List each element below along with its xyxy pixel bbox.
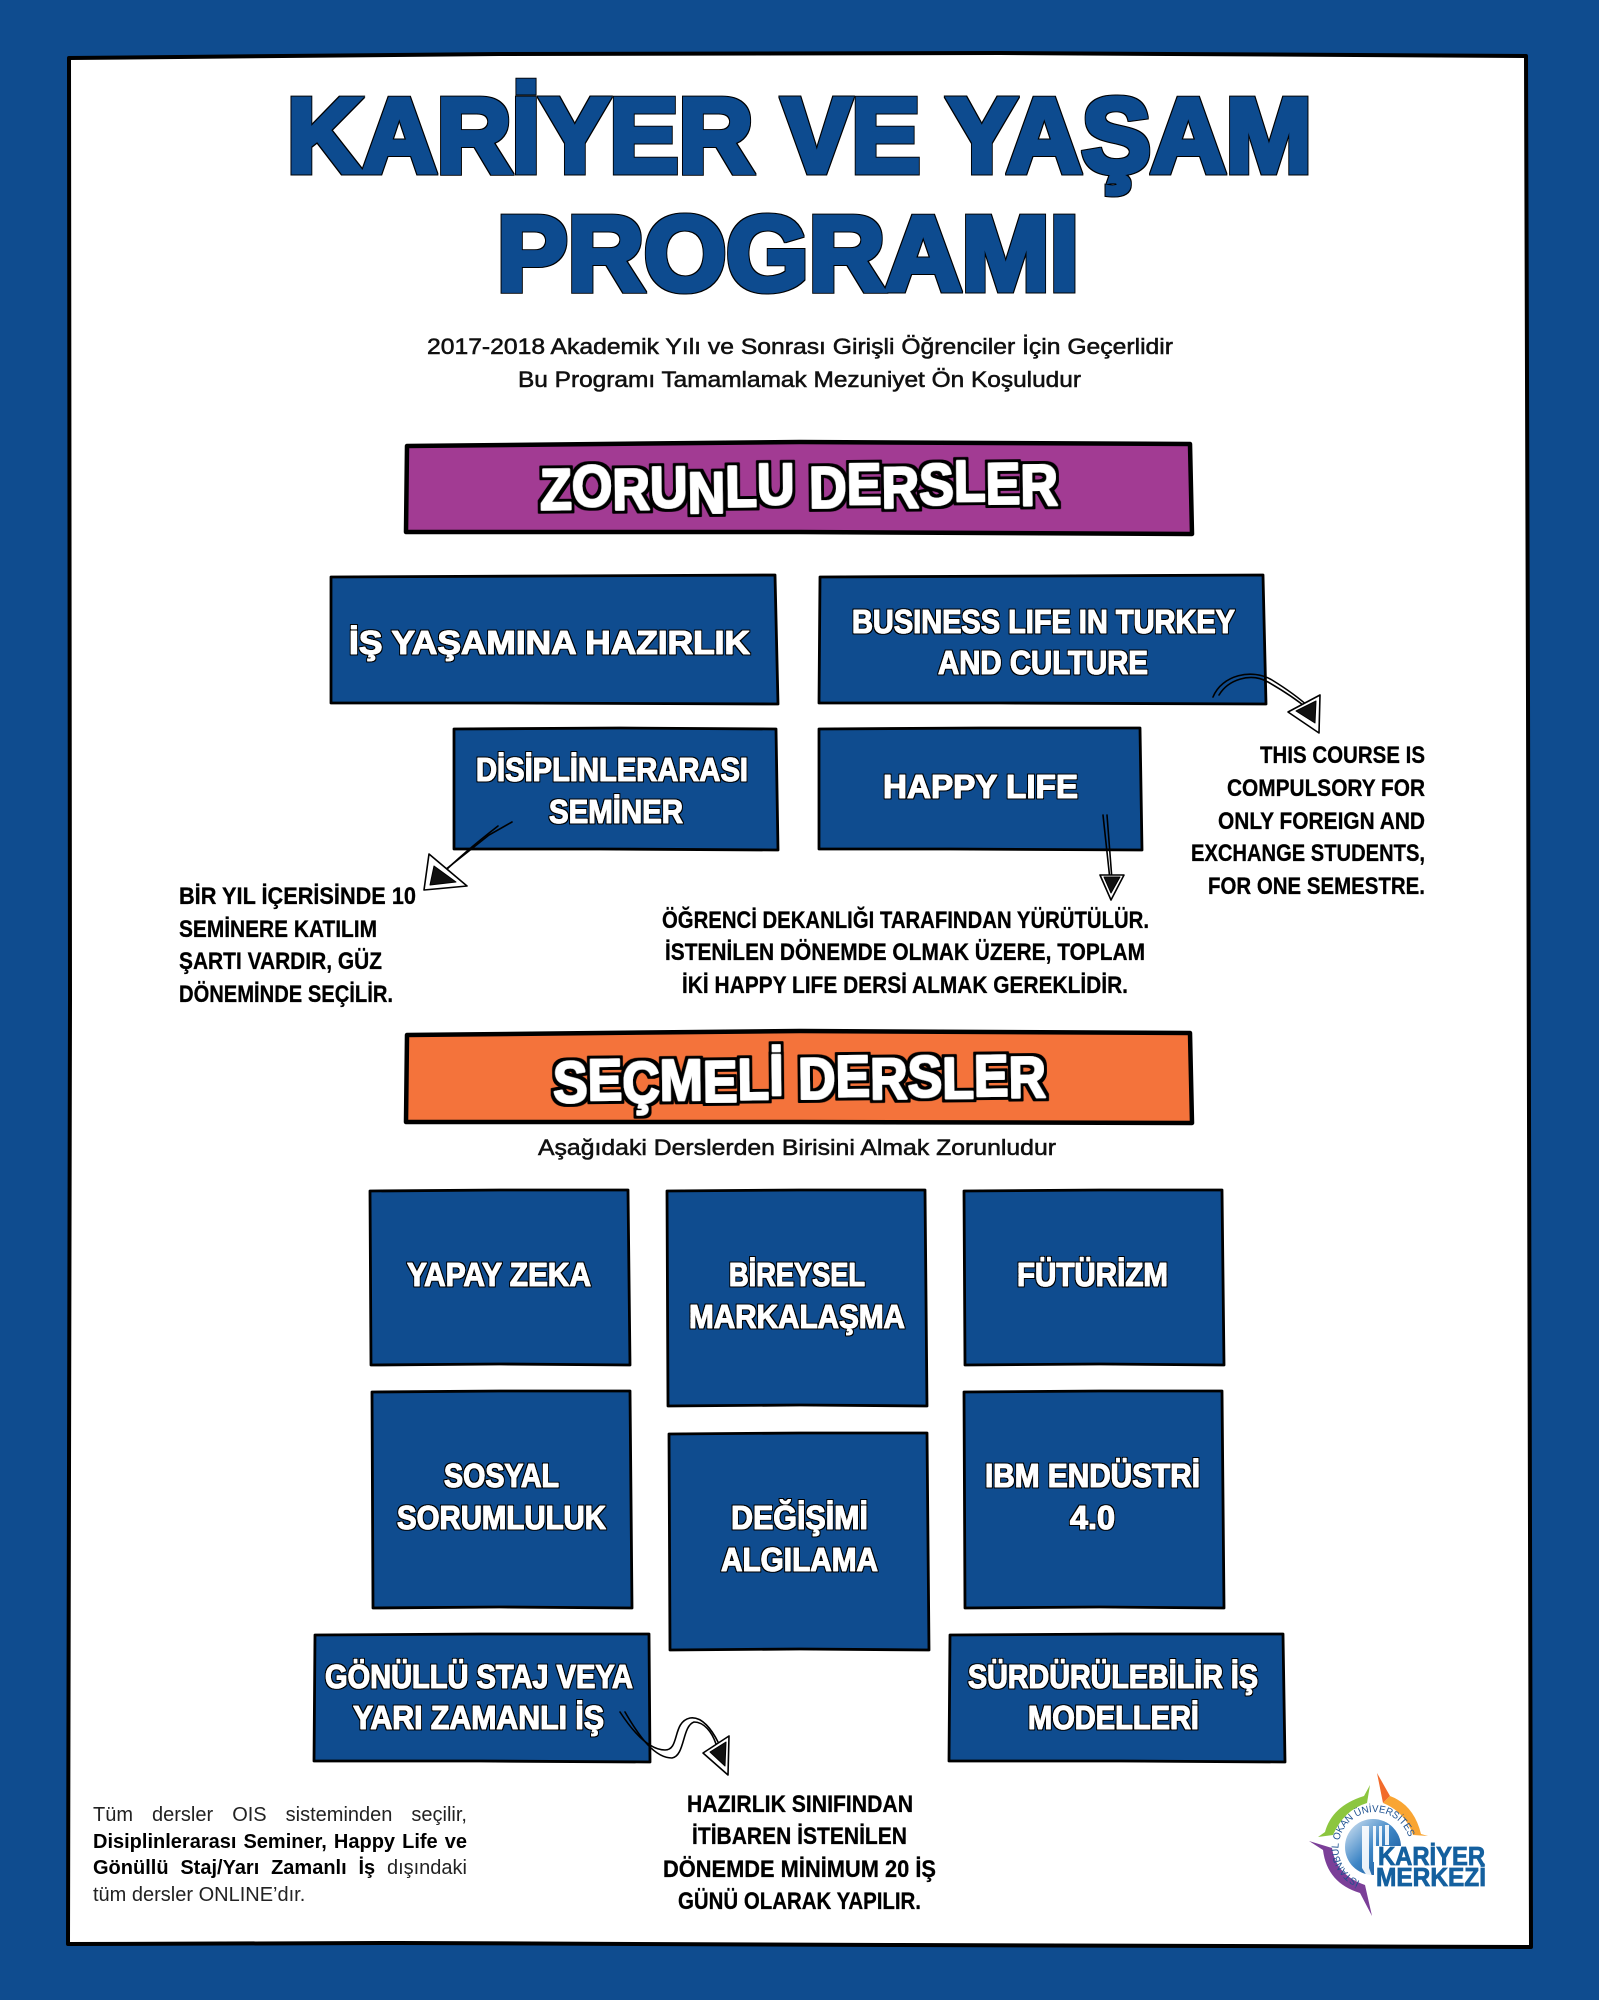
course box: disiplinlerarasi seminer: DİSİPLİNLERARASI xyxy=(476,751,748,788)
course box: yapay zeka xyxy=(370,1190,630,1365)
logo: kariyer merkezi: MERKEZİ xyxy=(1376,1862,1486,1892)
logo: kariyer merkezi: KARİYER xyxy=(1378,1841,1485,1871)
arrow: happy life note xyxy=(1100,815,1124,900)
course box: happy life xyxy=(819,728,1142,850)
course box: disiplinlerarasi seminer xyxy=(454,728,778,850)
note: foreign students: ONLY FOREIGN AND xyxy=(1218,808,1425,835)
note: happy life condition: İKİ HAPPY LIFE DERSİ ALMAK GEREKLİDİR. xyxy=(682,972,1128,999)
course box: happy life: HAPPY LIFE xyxy=(883,768,1078,805)
course box: surdurulebilir is modelleri: SÜRDÜRÜLEBİLİR İŞ xyxy=(968,1658,1258,1695)
note: staj condition: DÖNEMDE MİNİMUM 20 İŞ xyxy=(663,1856,936,1883)
note: happy life condition: ÖĞRENCİ DEKANLIĞI TARAFINDAN YÜRÜTÜLÜR. xyxy=(662,906,1149,934)
course box: futurizm: FÜTÜRİZM xyxy=(1017,1256,1168,1293)
note: foreign students: FOR ONE SEMESTRE. xyxy=(1208,873,1425,900)
title: KARİYER VE YAŞAM xyxy=(287,77,1312,195)
banner: secmeli dersler: SEÇMELİ DERSLER xyxy=(553,1040,1046,1117)
text block: online courses footnote: tüm dersler ONLINE’dır. xyxy=(93,1884,305,1906)
text block: online courses footnote: Gönüllü Staj/Yarı Zamanlı İş dışındaki xyxy=(93,1857,467,1879)
course box: disiplinlerarasi seminer: SEMİNER xyxy=(549,793,683,830)
note: staj condition: HAZIRLIK SINIFINDAN xyxy=(687,1791,913,1818)
course box: is yasamina hazirlik: İŞ YAŞAMINA HAZIRLIK xyxy=(349,624,750,661)
note: happy life condition: İSTENİLEN DÖNEMDE OLMAK ÜZERE, TOPLAM xyxy=(665,939,1145,966)
banner: zorunlu dersler: ZORUNLU DERSLER xyxy=(540,448,1058,528)
course box: business life: AND CULTURE xyxy=(938,644,1148,681)
arrow: staj note xyxy=(620,1712,729,1775)
note: seminer condition: BİR YIL İÇERİSİNDE 10 xyxy=(179,883,416,910)
note: staj condition: İTİBAREN İSTENİLEN xyxy=(692,1823,907,1850)
note: happy life condition xyxy=(662,906,1149,999)
note: foreign students xyxy=(1191,742,1425,900)
text block: online courses footnote xyxy=(93,1804,467,1906)
subtitle xyxy=(427,334,1174,392)
text block: online courses footnote: Disiplinlerarası Seminer, Happy Life ve xyxy=(93,1831,467,1853)
course box: degisimi algilama: DEĞİŞİMİ xyxy=(731,1499,868,1536)
text: elective instruction: Aşağıdaki Derslerden Birisini Almak Zorunludur xyxy=(538,1135,1057,1160)
title: PROGRAMI xyxy=(497,195,1079,313)
note: seminer condition xyxy=(179,883,416,1008)
subtitle: 2017-2018 Akademik Yılı ve Sonrası Girişli Öğrenciler İçin Geçerlidir xyxy=(427,334,1174,359)
note: seminer condition: DÖNEMİNDE SEÇİLİR. xyxy=(179,981,393,1008)
course box: business life xyxy=(819,575,1266,704)
note: foreign students: EXCHANGE STUDENTS, xyxy=(1191,840,1425,867)
course box: surdurulebilir is modelleri xyxy=(949,1634,1285,1762)
course box: ibm endustri 4.0: 4.0 xyxy=(1070,1499,1115,1536)
note: seminer condition: ŞARTI VARDIR, GÜZ xyxy=(179,948,382,975)
course box: is yasamina hazirlik xyxy=(331,575,778,704)
subtitle: Bu Programı Tamamlamak Mezuniyet Ön Koşuludur xyxy=(518,367,1082,392)
note: seminer condition: SEMİNERE KATILIM xyxy=(179,916,377,943)
course box: surdurulebilir is modelleri: MODELLERİ xyxy=(1028,1699,1199,1736)
text block: online courses footnote: Tüm dersler OIS sisteminden seçilir, xyxy=(93,1804,467,1826)
course box: bireysel markalasma xyxy=(667,1190,927,1406)
arrow: business life note xyxy=(1213,674,1320,733)
course box: yapay zeka: YAPAY ZEKA xyxy=(407,1256,591,1293)
course box: bireysel markalasma: BİREYSEL xyxy=(729,1256,865,1293)
course box: ibm endustri 4.0: IBM ENDÜSTRİ xyxy=(985,1457,1200,1494)
banner: secmeli dersler xyxy=(406,1031,1192,1123)
course box: sosyal sorumluluk: SORUMLULUK xyxy=(397,1499,606,1536)
course box: gonullu staj: GÖNÜLLÜ STAJ VEYA xyxy=(325,1658,633,1695)
logo: kariyer merkezi: İSTANBUL OKAN ÜNİVERSİTESİ xyxy=(1332,1804,1414,1888)
course box: ibm endustri 4.0 xyxy=(964,1391,1224,1608)
arrow: disiplinlerarasi note xyxy=(424,822,512,890)
course box: gonullu staj xyxy=(314,1634,650,1762)
course box: gonullu staj: YARI ZAMANLI İŞ xyxy=(353,1699,604,1736)
title xyxy=(287,77,1312,313)
course box: sosyal sorumluluk: SOSYAL xyxy=(444,1457,559,1494)
note: foreign students: COMPULSORY FOR xyxy=(1227,775,1425,802)
course box: degisimi algilama: ALGILAMA xyxy=(721,1541,878,1578)
course box: degisimi algilama xyxy=(669,1433,929,1650)
course box: business life: BUSINESS LIFE IN TURKEY xyxy=(852,603,1235,640)
course box: bireysel markalasma: MARKALAŞMA xyxy=(689,1298,905,1335)
banner: zorunlu dersler xyxy=(406,442,1192,534)
course box: futurizm xyxy=(964,1190,1224,1365)
course box: sosyal sorumluluk xyxy=(372,1391,632,1608)
note: foreign students: THIS COURSE IS xyxy=(1260,742,1425,769)
note: staj condition: GÜNÜ OLARAK YAPILIR. xyxy=(678,1888,921,1915)
note: staj condition xyxy=(663,1791,936,1915)
